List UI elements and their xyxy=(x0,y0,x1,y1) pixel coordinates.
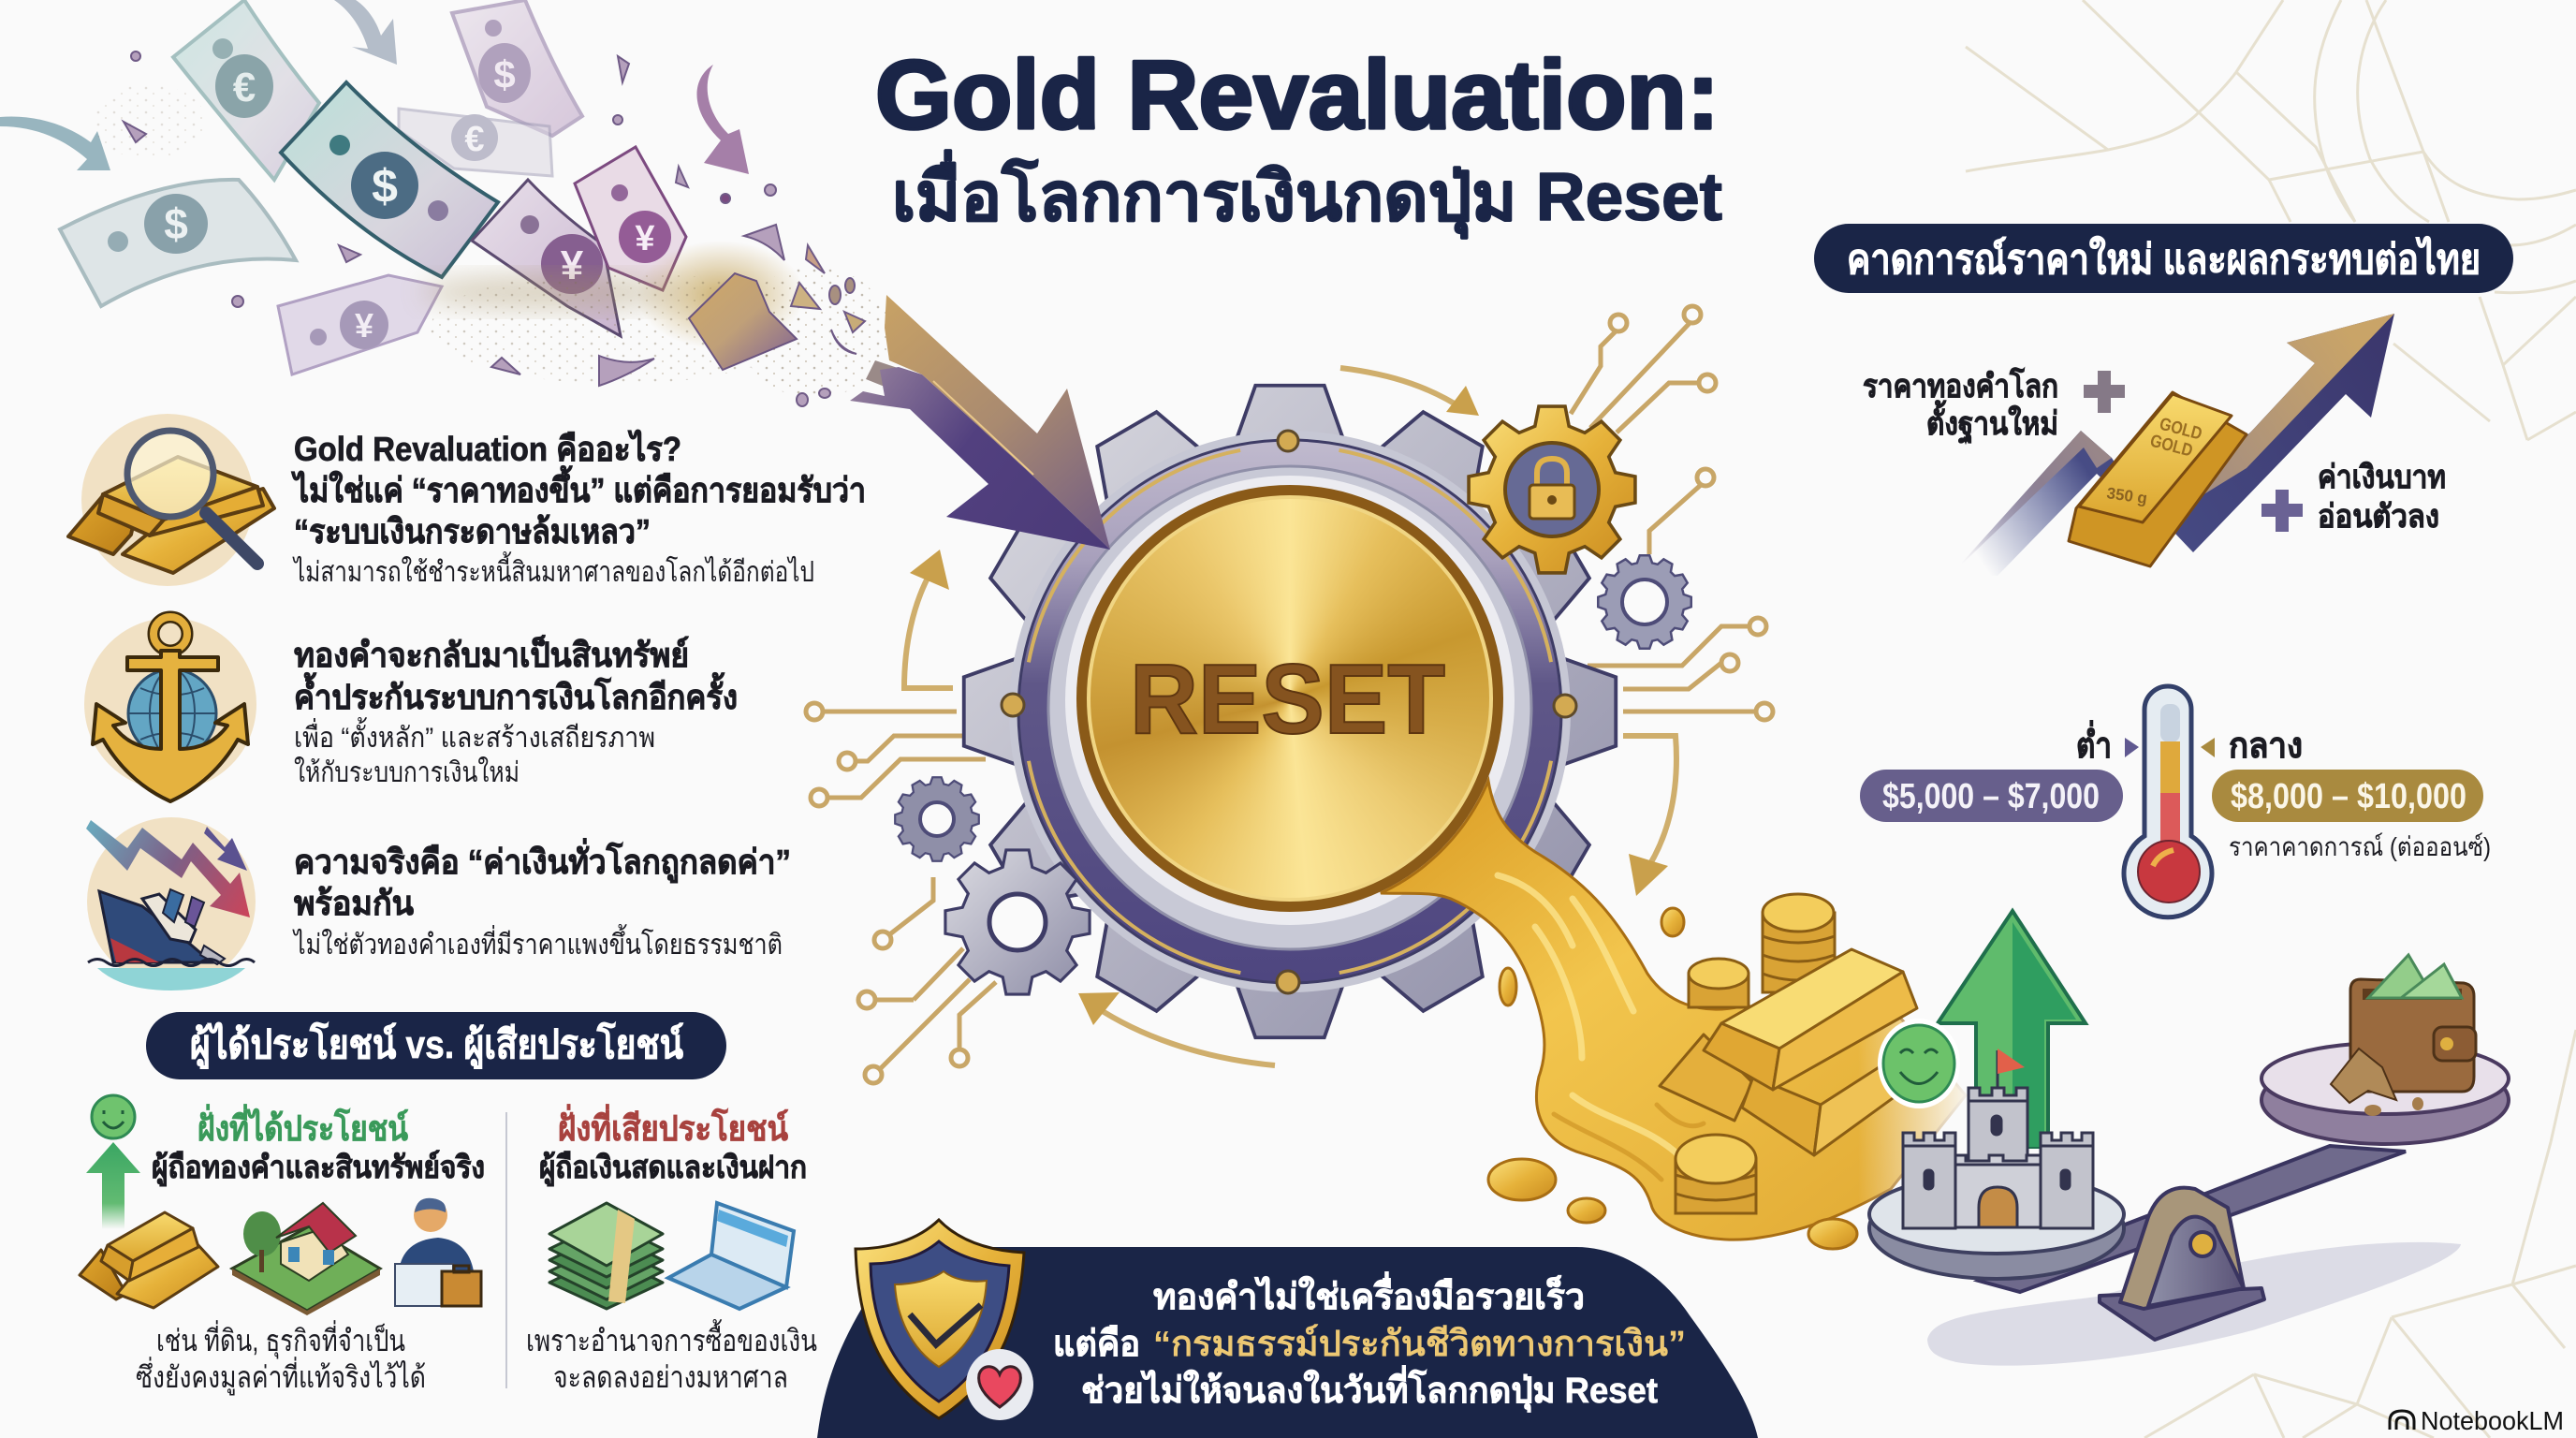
icon: gray gear medium left xyxy=(945,850,1090,994)
panel: winners xyxy=(80,1095,485,1396)
banknote: euro faded: € xyxy=(464,120,485,159)
gold bars in pool xyxy=(1660,949,1917,1155)
coin stack short xyxy=(1689,959,1749,1007)
text block: what is gold revaluation xyxy=(290,429,866,588)
banknote: blurred dollar xyxy=(60,180,296,306)
heading pill: forecast: คาดการณ์ราคาใหม่ และผลกระทบต่อไทย xyxy=(1847,235,2481,283)
icon: gray gear small left xyxy=(895,777,979,861)
icon: gold bar: 350 g xyxy=(2105,484,2148,507)
panel: losers xyxy=(526,1104,817,1394)
icon: gold bars xyxy=(80,1212,218,1308)
banknote: bottom yen xyxy=(278,275,442,374)
losers caption: เพราะอำนาจการซื้อของเงิน xyxy=(526,1319,817,1357)
banknote: purple top dollar xyxy=(452,0,582,136)
large steel gear xyxy=(964,386,1616,1037)
gold blobs xyxy=(1488,908,1857,1249)
label: baht xyxy=(2318,460,2446,535)
icon: gold bar: GOLD xyxy=(2158,415,2204,445)
banknote: bottom yen: ¥ xyxy=(355,306,373,345)
fulcrum xyxy=(2100,1188,2264,1340)
banknote: main dollar: $ xyxy=(372,160,398,213)
pill: mid price xyxy=(2212,770,2483,822)
losers subheading: ผู้ถือเงินสดและเงินฝาก xyxy=(539,1150,807,1187)
heading pill: winners vs losers: ผู้ได้ประโยชน์ vs. ผู้เสียประโยชน์ xyxy=(190,1021,683,1069)
callout text: แต่คือ xyxy=(1053,1325,1140,1364)
icon: businessman with briefcase xyxy=(395,1198,481,1306)
beam xyxy=(1979,1146,2406,1292)
gold dust cloud xyxy=(94,84,889,398)
banknote: blurred euro: € xyxy=(233,65,256,110)
winners caption: ซึ่งยังคงมูลค่าที่แท้จริงไว้ได้ xyxy=(136,1357,426,1396)
plus sign: gold price xyxy=(2084,371,2125,413)
winners heading: ฝั่งที่ได้ประโยชน์ xyxy=(198,1104,408,1148)
label: gold price xyxy=(1863,367,2058,445)
losers caption xyxy=(526,1319,817,1394)
icon: gold gear with padlock xyxy=(1469,406,1635,573)
icon: shield xyxy=(856,1220,1033,1420)
icon: green smiley arrow xyxy=(86,1095,140,1229)
icon: magnifier over gold bars xyxy=(68,414,274,586)
text block: what is gold revaluation: Gold Revaluation คืออะไร? xyxy=(294,429,681,468)
losers heading: ฝั่งที่เสียประโยชน์ xyxy=(558,1104,788,1148)
text block: anchor of the system: ให้กับระบบการเงินใหม่ xyxy=(294,756,520,788)
text block: all currencies devalue: ไม่ใช่ตัวทองคำเองที่มีราคาแพงขึ้นโดยธรรมชาติ xyxy=(292,924,783,961)
losers caption: จะลดลงอย่างมหาศาล xyxy=(553,1360,788,1394)
callout text: ทองคำไม่ใช่เครื่องมือรวยเร็ว xyxy=(1153,1271,1585,1317)
callout text xyxy=(1053,1271,1686,1413)
text block: what is gold revaluation: ไม่ใช่แค่ “ราคาทองขึ้น” แต่คือการยอมรับว่า xyxy=(290,465,866,509)
label: gold price: ราคาทองคำโลก xyxy=(1863,367,2058,404)
circuit lines xyxy=(806,306,1773,1083)
coin stack tall xyxy=(1763,894,1835,992)
pill: low price xyxy=(1860,770,2123,822)
thermometer with price forecast: กลาง xyxy=(2229,726,2303,766)
text block: what is gold revaluation: “ระบบเงินกระดาษล้มเหลว” xyxy=(294,512,651,550)
left pan xyxy=(1869,1175,2124,1279)
icon: wallet xyxy=(2331,955,2476,1116)
banknote: purple yen: ¥ xyxy=(561,242,584,288)
icon: sinking ship with falling charts xyxy=(86,817,256,990)
icon: gold bar xyxy=(2069,392,2247,566)
heading pill: forecast xyxy=(1814,224,2513,293)
banknote: magenta yen: ¥ xyxy=(635,219,655,258)
banknote: main dollar xyxy=(281,82,498,277)
text block: anchor of the system xyxy=(294,634,738,788)
reset button: RESET xyxy=(1130,644,1445,755)
castle xyxy=(1903,1049,2093,1228)
icon: heart badge xyxy=(966,1349,1033,1420)
heading pill: winners vs losers xyxy=(146,1012,726,1079)
icon: gold bar: GOLD xyxy=(2148,432,2195,462)
right pan xyxy=(2261,1043,2509,1144)
title xyxy=(875,41,1722,240)
winners caption xyxy=(136,1320,426,1396)
arrow: left incoming xyxy=(0,116,110,170)
icon: gray gear right xyxy=(1598,555,1691,649)
small gears xyxy=(895,406,1691,994)
winners subheading: ผู้ถือทองคำและสินทรัพย์จริง xyxy=(152,1150,485,1187)
arrow: purple incoming xyxy=(696,65,749,174)
text block: anchor of the system: ค้ำประกันระบบการเงินโลกอีกครั้ง xyxy=(294,672,738,716)
green up arrow xyxy=(1938,911,2086,1147)
thermometer with price forecast xyxy=(1860,686,2491,917)
pill: low price: $5,000 – $7,000 xyxy=(1882,777,2100,816)
callout text: “กรมธรรม์ประกันชีวิตทางการเงิน” xyxy=(1153,1324,1686,1364)
balance scale xyxy=(1869,911,2509,1366)
icon: house on land xyxy=(232,1203,380,1315)
callout text: ช่วยไม่ให้จนลงในวันที่โลกกดปุ่ม Reset xyxy=(1081,1365,1658,1413)
label: gold price: ตั้งฐานใหม่ xyxy=(1926,400,2058,445)
coin stack front xyxy=(1676,1135,1756,1213)
title: Gold Revaluation: xyxy=(875,41,1720,150)
icon: smiley xyxy=(1878,1019,1960,1108)
text block: all currencies devalue xyxy=(292,838,791,961)
text block: all currencies devalue: ความจริงคือ “ค่าเงินทั่วโลกถูกลดค่า” xyxy=(294,838,791,884)
note: forecast per ounce: ราคาคาดการณ์ (ต่อออนซ์) xyxy=(2229,832,2491,861)
plus sign: baht xyxy=(2261,490,2303,532)
label: baht: อ่อนตัวลง xyxy=(2318,499,2439,535)
banknote: euro faded xyxy=(399,109,552,176)
falling banknotes xyxy=(0,0,903,406)
icon: cash stack xyxy=(549,1203,663,1309)
molten gold stream and pool xyxy=(1381,781,1975,1250)
decorative line pattern xyxy=(1966,0,2576,1438)
text block: what is gold revaluation: ไม่สามารถใช้ชำระหนี้สินมหาศาลของโลกได้อีกต่อไป xyxy=(292,551,814,588)
banknote: purple top dollar: $ xyxy=(493,52,516,96)
label: baht: ค่าเงินบาท xyxy=(2318,460,2446,495)
reset button xyxy=(1076,485,1503,912)
torn note xyxy=(689,273,797,370)
mid label xyxy=(2201,738,2215,757)
banknote: blurred dollar: $ xyxy=(164,199,188,248)
text block: anchor of the system: ทองคำจะกลับมาเป็นสินทรัพย์ xyxy=(294,634,689,674)
banknote: purple yen xyxy=(472,180,621,336)
big purple arrow into reset button xyxy=(850,295,1110,550)
banknote: magenta yen xyxy=(575,147,686,290)
icon: laptop xyxy=(668,1203,794,1309)
text block: anchor of the system: เพื่อ “ตั้งหลัก” และสร้างเสถียรภาพ xyxy=(294,717,655,754)
text block: all currencies devalue: พร้อมกัน xyxy=(294,884,414,922)
curved gold arrows xyxy=(904,368,1676,1065)
pill: mid price: $8,000 – $10,000 xyxy=(2231,777,2466,816)
banknote: blurred euro xyxy=(173,0,319,180)
title: เมื่อโลกการเงินกดปุ่ม Reset xyxy=(892,149,1722,240)
flying shards xyxy=(124,51,903,406)
callout banner: gold is insurance xyxy=(817,1220,1758,1438)
icon: thermometer xyxy=(2124,686,2212,917)
logo: NotebookLM: NotebookLM xyxy=(2421,1406,2564,1435)
arrow: top incoming xyxy=(334,0,397,65)
icon: anchor and globe xyxy=(84,617,256,801)
chart: rising arrow with gold bar xyxy=(1863,314,2446,576)
winners caption: เช่น ที่ดิน, ธุรกิจที่จำเป็น xyxy=(156,1320,405,1359)
low label: ต่ำ xyxy=(2076,720,2112,766)
shadow xyxy=(1927,1242,2461,1366)
